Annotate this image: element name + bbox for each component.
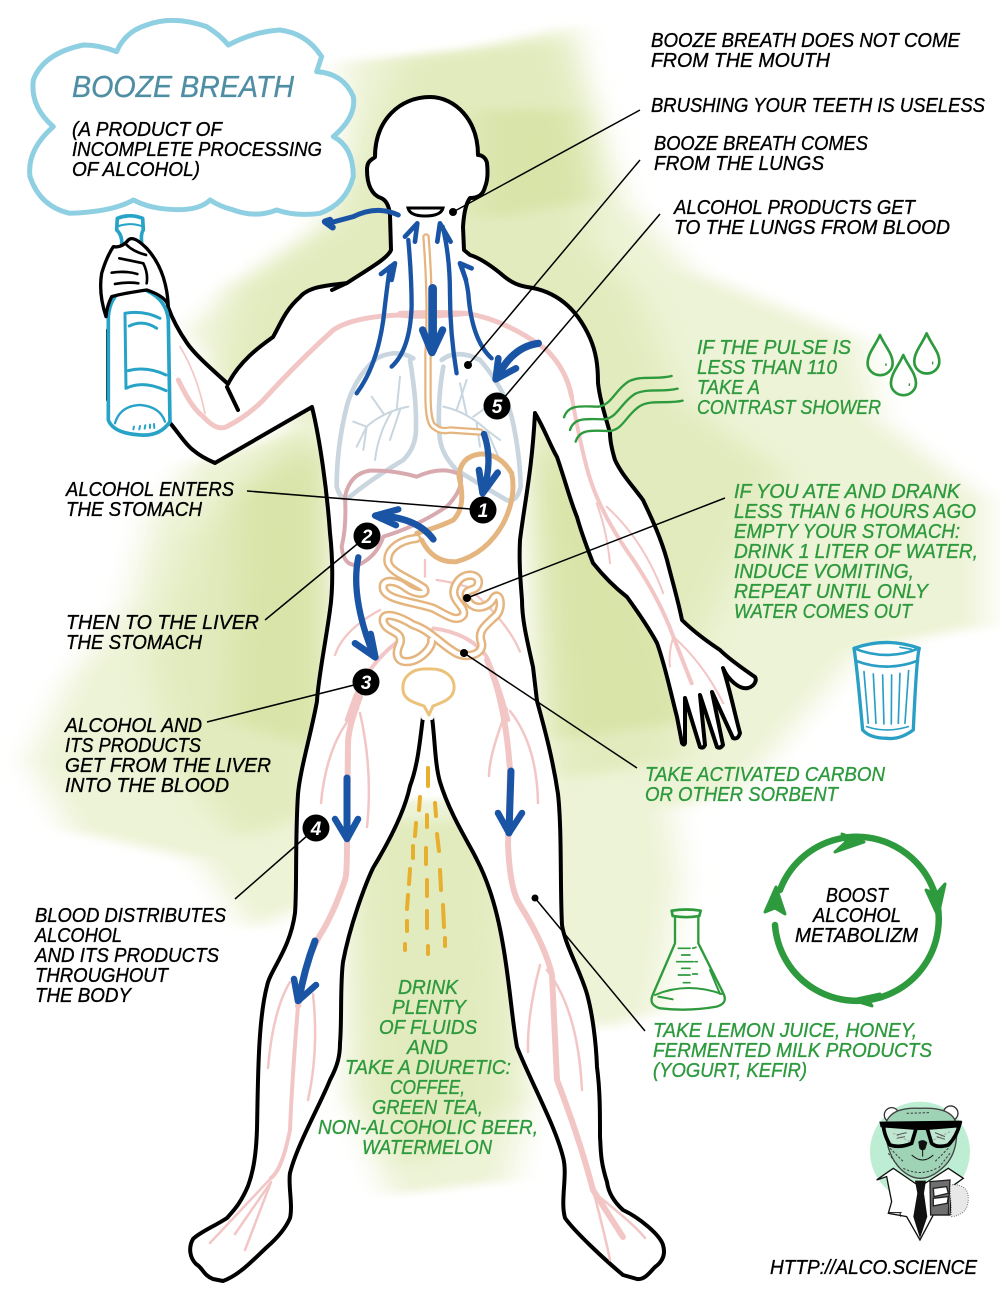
text: alcohol and products into blood: ALCOHOL AND [64,715,202,737]
text: cloud title: BOOZE BREATH [72,69,295,104]
text: empty your stomach: INDUCE VOMITING, [734,561,914,583]
text: booze breath does not come from the mouth [651,30,961,72]
text: drink plenty of fluids: NON-ALCOHOLIC BEER, [318,1117,538,1139]
text: alcohol enters stomach [65,479,235,521]
text: alcohol and products into blood: ITS PRODUCTS [65,735,202,757]
badge 3 [352,668,380,696]
text: lemon juice [653,1020,933,1082]
text: boost alcohol metabolizm [795,885,918,947]
text: drink plenty of fluids [318,977,538,1159]
text: cloud subtitle: OF ALCOHOL) [72,159,200,181]
text: empty your stomach: EMPTY YOUR STOMACH: [734,521,960,543]
number badges [302,392,510,842]
text: comes from lungs: BOOZE BREATH COMES [654,133,869,155]
icon: metabolism cycle arrows [765,834,945,1006]
text: empty your stomach: IF YOU ATE AND DRANK [734,481,962,503]
icon: bottle [108,216,170,435]
text: alcohol and products into blood [64,715,271,797]
text: blood distributes: THROUGHOUT [35,965,170,987]
text: alcohol enters stomach: ALCOHOL ENTERS [65,479,235,501]
urine stream [405,768,445,954]
icon: water glass [854,642,919,739]
text: cloud subtitle: INCOMPLETE PROCESSING [72,139,322,161]
text: comes from lungs [654,133,869,175]
mouth [408,208,443,216]
text: drink plenty of fluids: TAKE A DIURETIC: [345,1057,511,1079]
text: blood distributes: AND ITS PRODUCTS [34,945,220,967]
text: boost alcohol metabolizm: BOOST [826,885,890,907]
stomach [417,454,513,562]
text: alcohol and products into blood: GET FROM THE LIVER [65,755,271,777]
badge 2: 2 [361,527,373,548]
badge 5: 5 [492,397,503,418]
text: cloud subtitle [72,119,322,181]
text: drink plenty of fluids: PLENTY [392,997,468,1019]
badge 4: 4 [310,819,322,840]
text: lemon juice: TAKE LEMON JUICE, HONEY, [653,1020,917,1042]
text: website url: HTTP://ALCO.SCIENCE [770,1257,978,1279]
text: drink plenty of fluids: COFFEE, [390,1077,465,1099]
body silhouette [108,97,756,1281]
icon: flask [651,909,725,1010]
bladder [403,669,454,715]
text: empty your stomach: REPEAT UNTIL ONLY [734,581,930,603]
text: booze breath does not come from the mouth: BOOZE BREATH DOES NOT COME [651,30,961,52]
text: empty your stomach: LESS THAN 6 HOURS AGO [734,501,976,523]
text: alcohol and products into blood: INTO THE BLOOD [65,775,229,797]
text: activated carbon [645,764,886,806]
text: then to liver: THE STOMACH [66,632,203,654]
text: drink plenty of fluids: GREEN TEA, [372,1097,483,1119]
esophagus [426,237,480,432]
text: blood distributes: THE BODY [35,985,133,1007]
text: drink plenty of fluids: OF FLUIDS [379,1017,478,1039]
text: blood distributes [34,905,227,1007]
text: alcohol products to lungs: ALCOHOL PRODUCTS GET [673,197,917,219]
text: contrast shower: LESS THAN 110 [697,357,837,379]
text: then to liver [66,612,259,654]
lungs [337,353,521,501]
text: activated carbon: OR OTHER SORBENT [645,784,840,806]
text: blood distributes: ALCOHOL [34,925,122,947]
text: boost alcohol metabolizm: METABOLIZM [795,925,918,947]
text: then to liver: THEN TO THE LIVER [66,612,259,634]
text: drink plenty of fluids: WATERMELON [362,1137,493,1159]
text: lemon juice: FERMENTED MILK PRODUCTS [653,1040,933,1062]
icon: hand gripping bottle [101,239,168,317]
icon: thought cloud [30,20,354,214]
text: boost alcohol metabolizm: ALCOHOL [812,905,901,927]
icon: shower water waves [564,376,683,442]
leader end dots [449,208,538,902]
text: booze breath does not come from the mouth: FROM THE MOUTH [651,50,831,72]
small intestine [383,538,500,662]
text: activated carbon: TAKE ACTIVATED CARBON [645,764,886,786]
text: empty your stomach: WATER COMES OUT [734,601,914,623]
text: empty your stomach: DRINK 1 LITER OF WATER, [734,541,978,563]
liver [342,470,461,565]
text: drink plenty of fluids: DRINK [398,977,460,999]
text: empty your stomach [734,481,978,623]
text: lemon juice: (YOGURT, KEFIR) [653,1060,807,1082]
left lung [337,353,416,499]
text: drink plenty of fluids: AND [406,1037,448,1059]
text: contrast shower: CONTRAST SHOWER [697,397,881,419]
text: alcohol enters stomach: THE STOMACH [66,499,203,521]
badge 1 [470,496,496,524]
blue flow arrows [294,210,538,1001]
text: comes from lungs: FROM THE LUNGS [654,153,825,175]
icon: scientist bear [870,1102,970,1240]
text: contrast shower: TAKE A [697,377,760,399]
text: contrast shower [697,337,881,419]
text: cloud subtitle: (A PRODUCT OF [72,119,224,141]
badge 5 [484,392,510,420]
right lung [439,354,521,501]
badge 2 [354,522,380,550]
text: alcohol products to lungs: TO THE LUNGS FROM BLOOD [674,217,950,239]
blood vessels [178,312,723,1260]
leader lines [207,110,725,1031]
text: contrast shower: IF THE PULSE IS [697,337,852,359]
text: blood distributes: BLOOD DISTRIBUTES [35,905,227,927]
body details: elbow crease and shoulder fold [227,283,431,717]
badge 4 [302,814,330,842]
icon: water drops [868,333,939,395]
badge 3: 3 [361,673,372,694]
badge 1: 1 [478,501,488,522]
text: alcohol products to lungs [673,197,950,239]
